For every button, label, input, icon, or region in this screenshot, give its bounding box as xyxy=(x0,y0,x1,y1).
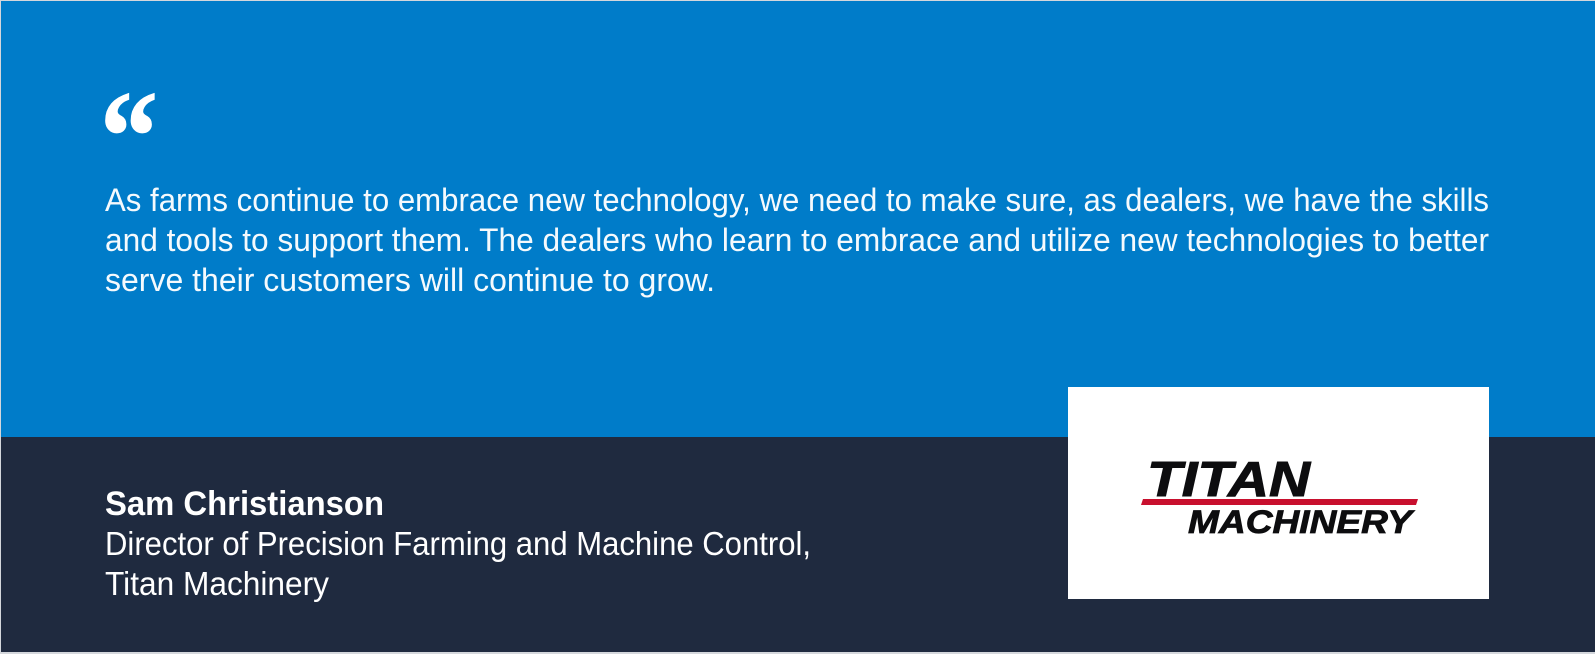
logo red bar xyxy=(1141,499,1418,505)
speaker role: Director of Precision Farming and Machine Control, xyxy=(105,525,811,562)
quote text: As farms continue to embrace new technology, we need to make sure, as dealers, we have the skills xyxy=(105,182,1489,218)
logo wordmark: MACHINERY: MACHINERY xyxy=(1188,504,1415,540)
quote text: and tools to support them. The dealers who learn to embrace and utilize new technologies to better xyxy=(105,222,1489,258)
quote text: serve their customers will continue to grow. xyxy=(105,262,715,298)
speaker company: Titan Machinery xyxy=(105,565,329,602)
quote text xyxy=(105,182,1489,298)
logo card: Titan Machinery xyxy=(1068,387,1489,599)
attribution: speaker name and title xyxy=(105,485,811,602)
panel: blue quote background xyxy=(1,1,1595,437)
panel: dark attribution background xyxy=(1,437,1595,652)
logo wordmark: TITAN: TITAN xyxy=(1147,453,1312,507)
speaker name: Sam Christianson xyxy=(105,485,384,523)
icon: opening quotation mark: “ xyxy=(100,65,158,209)
